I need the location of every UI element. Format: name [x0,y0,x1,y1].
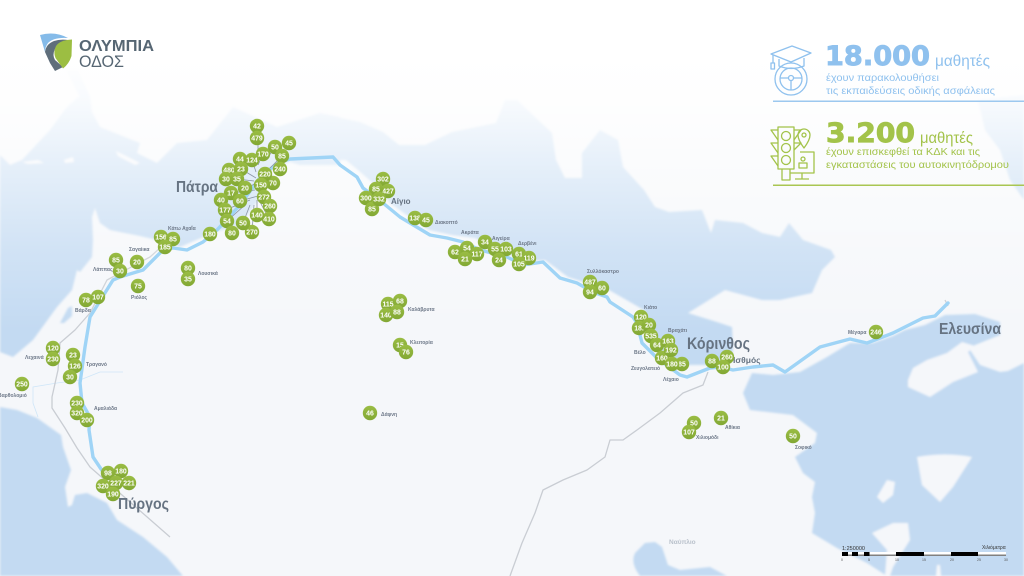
place labels: Λέχαιο [663,377,679,383]
student bubbles: Patras cluster: 20 [241,185,249,192]
student bubbles: Athikia, Chiliomodi, Sofiko: 50 [789,433,797,440]
student bubbles: Xylokastro to Isthmos: 64 [653,342,661,349]
scale bar: 20 [950,558,954,562]
place labels: Βέλο [634,350,646,356]
scale bar: 10 [895,558,899,562]
logo: Olympia Odos [40,34,154,71]
student bubbles: Patras cluster: 35 [233,176,241,183]
city: Isthmos: Ισθμός [733,355,761,365]
student bubbles: Varda to Kato Achaia: 75 [134,283,142,290]
student bubbles: Kalavryta, Kleitoria, Dafni [363,294,413,420]
student bubbles: Aigio to Derveni: 103 [500,246,512,253]
place labels: Κλειτορία [410,340,434,346]
student bubbles: Patras cluster: 80 [228,230,236,237]
student bubbles: Aigio to Derveni: 55 [491,246,499,253]
student bubbles: Aigio to Derveni: 45 [422,217,430,224]
student bubbles: Patras cluster: 270 [246,229,258,236]
scale bar: 0 [841,558,843,562]
student bubbles: Pyrgos to Lechaina: 23 [69,352,77,359]
logo: Olympia Odos: ΟΔΟΣ [79,53,124,71]
city: Corinth: Κόρινθος [687,335,750,353]
place labels: Δάφνη [381,412,397,418]
place labels: Δερβένι [518,241,537,247]
student bubbles: Patras cluster: 240 [274,166,286,173]
student bubbles: Kalavryta, Kleitoria, Dafni: 88 [393,309,401,316]
rule [773,100,1024,102]
student bubbles: Pyrgos to Lechaina: 98 [104,470,112,477]
place labels: Σοφικό [795,445,812,451]
city: Patras: Πάτρα [176,179,218,196]
motorway route [80,157,948,472]
student bubbles: Pyrgos to Lechaina: 250 [16,381,28,388]
student bubbles: Varda to Kato Achaia: 35 [184,276,192,283]
big number: 3.200 [826,118,915,149]
student bubbles: Varda to Kato Achaia: 78 [82,297,90,304]
student bubbles: Athikia, Chiliomodi, Sofiko [682,411,800,443]
student bubbles: Xylokastro to Isthmos: 160 [656,355,668,362]
student bubbles: Xylokastro to Isthmos: 535 [645,333,657,340]
student bubbles: Varda to Kato Achaia: 20 [133,259,141,266]
stat panel: 18.000 students [771,41,1024,102]
student bubbles: Kalavryta, Kleitoria, Dafni: 68 [396,298,404,305]
student bubbles: Aigio to Derveni: 21 [461,256,469,263]
student bubbles: Aigio to Derveni: 300 [360,195,372,202]
student bubbles: Patras cluster: 150 [255,182,267,189]
student bubbles: Xylokastro to Isthmos: 260 [721,354,733,361]
student bubbles: Xylokastro to Isthmos: 88 [708,358,716,365]
student bubbles: Pyrgos to Lechaina: 320 [71,410,83,417]
place labels: Καλάβρυτα [408,307,436,313]
student bubbles: Aigio to Derveni: 138 [409,215,421,222]
caption: έχουν επισκεφθεί τα ΚΔΚ και τις [826,146,980,158]
student bubbles: Pyrgos to Lechaina: 227 [110,480,122,487]
student bubbles: Xylokastro to Isthmos: 180 [666,361,678,368]
student bubbles: Xylokastro to Isthmos: 192 [665,347,677,354]
student bubbles: Xylokastro to Isthmos: 120 [635,314,647,321]
student bubbles: Patras cluster: 85 [278,153,286,160]
student bubbles: Varda to Kato Achaia [79,227,217,307]
sea: faint north-east corner [978,95,1024,200]
place labels: Λουσικά [198,271,219,277]
place labels: Χιλιομόδι [696,435,719,441]
sea: Gulf of Corinth [300,100,835,365]
student bubbles: Aigio to Derveni: 302 [377,176,389,183]
unit: μαθητές [920,130,973,147]
student bubbles: Patras cluster: 60 [236,198,244,205]
student bubbles: Patras cluster: 480 [223,167,235,174]
rivers [33,372,123,417]
scale bar: 15 [922,558,926,562]
student bubbles: Patras cluster: 177 [219,207,231,214]
student bubbles: Pyrgos to Lechaina: 200 [81,417,93,424]
place label: Nafplio: Ναύπλιο [669,538,696,546]
student bubbles: Athikia, Chiliomodi, Sofiko: 50 [690,420,698,427]
student bubbles: Xylokastro to Isthmos: 100 [717,364,729,371]
student bubbles: Patras cluster: 124 [246,157,258,164]
scale bar: Χιλιόμετρα [982,544,1006,551]
sea: Argolic gulf [633,542,727,576]
unit: μαθητές [935,53,990,70]
student bubbles: Patras cluster: 50 [271,144,279,151]
student bubbles: Xylokastro to Isthmos: 85 [678,361,686,368]
student bubbles: Patras cluster: 220 [259,171,271,178]
student bubbles: Pyrgos to Lechaina: 320 [97,483,109,490]
student bubbles: Aigio to Derveni: 85 [368,206,376,213]
student bubbles: Patras cluster: 40 [217,197,225,204]
stat panel: 3.200 students [771,118,1024,186]
student bubbles: Patras cluster: 410 [263,216,275,223]
student bubbles: Aigio to Derveni: 34 [481,239,489,246]
logo mark [40,34,72,71]
city: Aigio: Αίγιο [391,197,411,206]
scale bar: 30 [1004,558,1008,562]
student bubbles: Patras cluster: 260 [264,203,276,210]
student bubbles: Xylokastro to Isthmos: 246 [870,329,882,336]
student bubbles: Pyrgos to Lechaina: 180 [115,468,127,475]
student bubbles: Xylokastro to Isthmos: 18. [634,325,644,332]
place labels: Αμαλιάδα [94,406,118,412]
scale bar: 1:250000 [842,546,865,552]
city: Elefsina: Ελευσίνα [939,321,1001,338]
student bubbles: Xylokastro to Isthmos [583,275,883,374]
stat panel: 3.200 students: εγκαταστάσεις του αυτοκινητόδρομου [826,159,1009,171]
student bubbles: Varda to Kato Achaia: 85 [112,257,120,264]
sea: Patraikos and Ionian [0,70,340,357]
student bubbles: Aigio to Derveni: 62 [451,249,459,256]
student bubbles: Patras cluster: 23 [237,166,245,173]
place labels: Σαγαίικα [129,247,150,253]
student bubbles: Xylokastro to Isthmos: 20 [645,322,653,329]
student bubbles: Pyrgos to Lechaina: 230 [71,400,83,407]
icon: mortarboard and steering wheel [771,46,811,95]
student bubbles: Patras cluster: 140 [251,212,263,219]
student bubbles: Kalavryta, Kleitoria, Dafni: 76 [402,349,410,356]
student bubbles: Xylokastro to Isthmos: 487 [584,279,596,286]
grey roads [52,248,948,576]
student bubbles: Patras cluster: 170 [257,151,269,158]
student bubbles: Patras cluster: 30 [222,176,230,183]
student bubbles: Pyrgos to Lechaina [15,341,136,501]
student bubbles: Patras cluster: 479 [251,135,263,142]
scale bar: 25 [977,558,981,562]
student bubbles: Aigio to Derveni: 85 [372,186,380,193]
student bubbles: Aigio to Derveni [359,172,536,271]
student bubbles: Aigio to Derveni: 332 [373,196,385,203]
place labels: Ακράτα [461,230,480,236]
student bubbles: Xylokastro to Isthmos: 60 [598,285,606,292]
place labels: Ριόλος [131,295,148,301]
student bubbles: Kalavryta, Kleitoria, Dafni: 46 [366,410,374,417]
student bubbles: Aigio to Derveni: 117 [471,251,483,258]
student bubbles: Patras cluster: 70 [269,180,277,187]
student bubbles: Kalavryta, Kleitoria, Dafni: 15 [396,342,404,349]
place labels: Κιάτο [644,305,657,311]
Patras callout lines [225,138,282,232]
student bubbles: Athikia, Chiliomodi, Sofiko: 21 [717,415,725,422]
student bubbles: Aigio to Derveni: 105 [513,261,525,268]
student bubbles: Athikia, Chiliomodi, Sofiko: 107 [683,429,695,436]
student bubbles: Varda to Kato Achaia: 85 [169,236,177,243]
scale bar [841,544,1008,562]
city: Pyrgos: Πύργος [118,496,169,513]
student bubbles: Aigio to Derveni: 427 [382,188,394,195]
islands: Salamis, Aegina and others [22,151,978,576]
place labels: Λεχαινά [25,355,45,361]
place labels: Βάρδα [75,308,92,314]
student bubbles: Patras cluster: 17 [227,190,235,197]
rule [773,184,1024,186]
student bubbles: Patras cluster: 44 [236,156,244,163]
place labels: Ζευγολατειό [631,366,660,372]
place labels: Λάππας [93,267,113,273]
student bubbles: Varda to Kato Achaia: 180 [204,231,216,238]
student bubbles: Aigio to Derveni: 119 [523,255,535,262]
place labels: Συλλόκαστρο [587,269,619,275]
student bubbles: Kalavryta, Kleitoria, Dafni: 115 [382,301,394,308]
place labels: Αθίκια [725,425,741,431]
place labels: Βραχάτι [668,328,688,334]
place labels: Τραγανό [86,362,107,368]
student bubbles: Varda to Kato Achaia: 30 [116,268,124,275]
place labels: Κάτω Αχαΐα [168,226,197,232]
student bubbles: Patras cluster: 54 [223,218,231,225]
scale bar: 5 [868,558,870,562]
student bubbles: Aigio to Derveni: 61 [515,251,523,258]
student bubbles: Pyrgos to Lechaina: 120 [47,345,59,352]
student bubbles: Varda to Kato Achaia: 156 [155,234,167,241]
student bubbles: Varda to Kato Achaia: 185 [159,244,171,251]
student bubbles: Patras cluster: 50 [239,220,247,227]
sea: Saronic Gulf [743,314,1024,576]
student bubbles: Aigio to Derveni: 54 [463,245,471,252]
student bubbles: Pyrgos to Lechaina: 230 [47,356,59,363]
student bubbles: Patras cluster [214,119,296,240]
place labels: Διακοπτό [435,220,458,226]
icon: traffic light and monitor [771,127,814,180]
student bubbles: Patras cluster: 272 [258,194,270,201]
student bubbles: Varda to Kato Achaia: 107 [92,294,104,301]
student bubbles: Pyrgos to Lechaina: 126 [69,363,81,370]
place labels: Μέγαρα [848,330,867,336]
student bubbles: Patras cluster: 45 [285,140,293,147]
student bubbles: Pyrgos to Lechaina: 30 [66,374,74,381]
student bubbles: Pyrgos to Lechaina: 190 [107,491,119,498]
student bubbles: Aigio to Derveni: 24 [495,257,503,264]
student bubbles: Kalavryta, Kleitoria, Dafni: 140 [380,312,392,319]
logo text: ΟΛΥΜΠΙΑ [79,38,154,55]
place labels: Αιγείρα [492,236,511,242]
big number: 18.000 [825,41,930,72]
student bubbles: Varda to Kato Achaia: 80 [184,265,192,272]
city labels [118,179,1001,513]
student bubbles: Pyrgos to Lechaina: 221 [123,480,135,487]
student bubbles: Xylokastro to Isthmos: 94 [586,289,594,296]
stat panel: 18.000 students: τις εκπαιδεύσεις οδικής ασφάλειας [826,85,995,97]
sea: Ionian south [0,407,183,576]
caption: έχουν παρακολουθήσει [826,72,940,84]
student bubbles: Patras cluster: 42 [253,123,261,130]
student bubbles: Xylokastro to Isthmos: 163 [662,338,674,345]
place labels [0,220,867,451]
